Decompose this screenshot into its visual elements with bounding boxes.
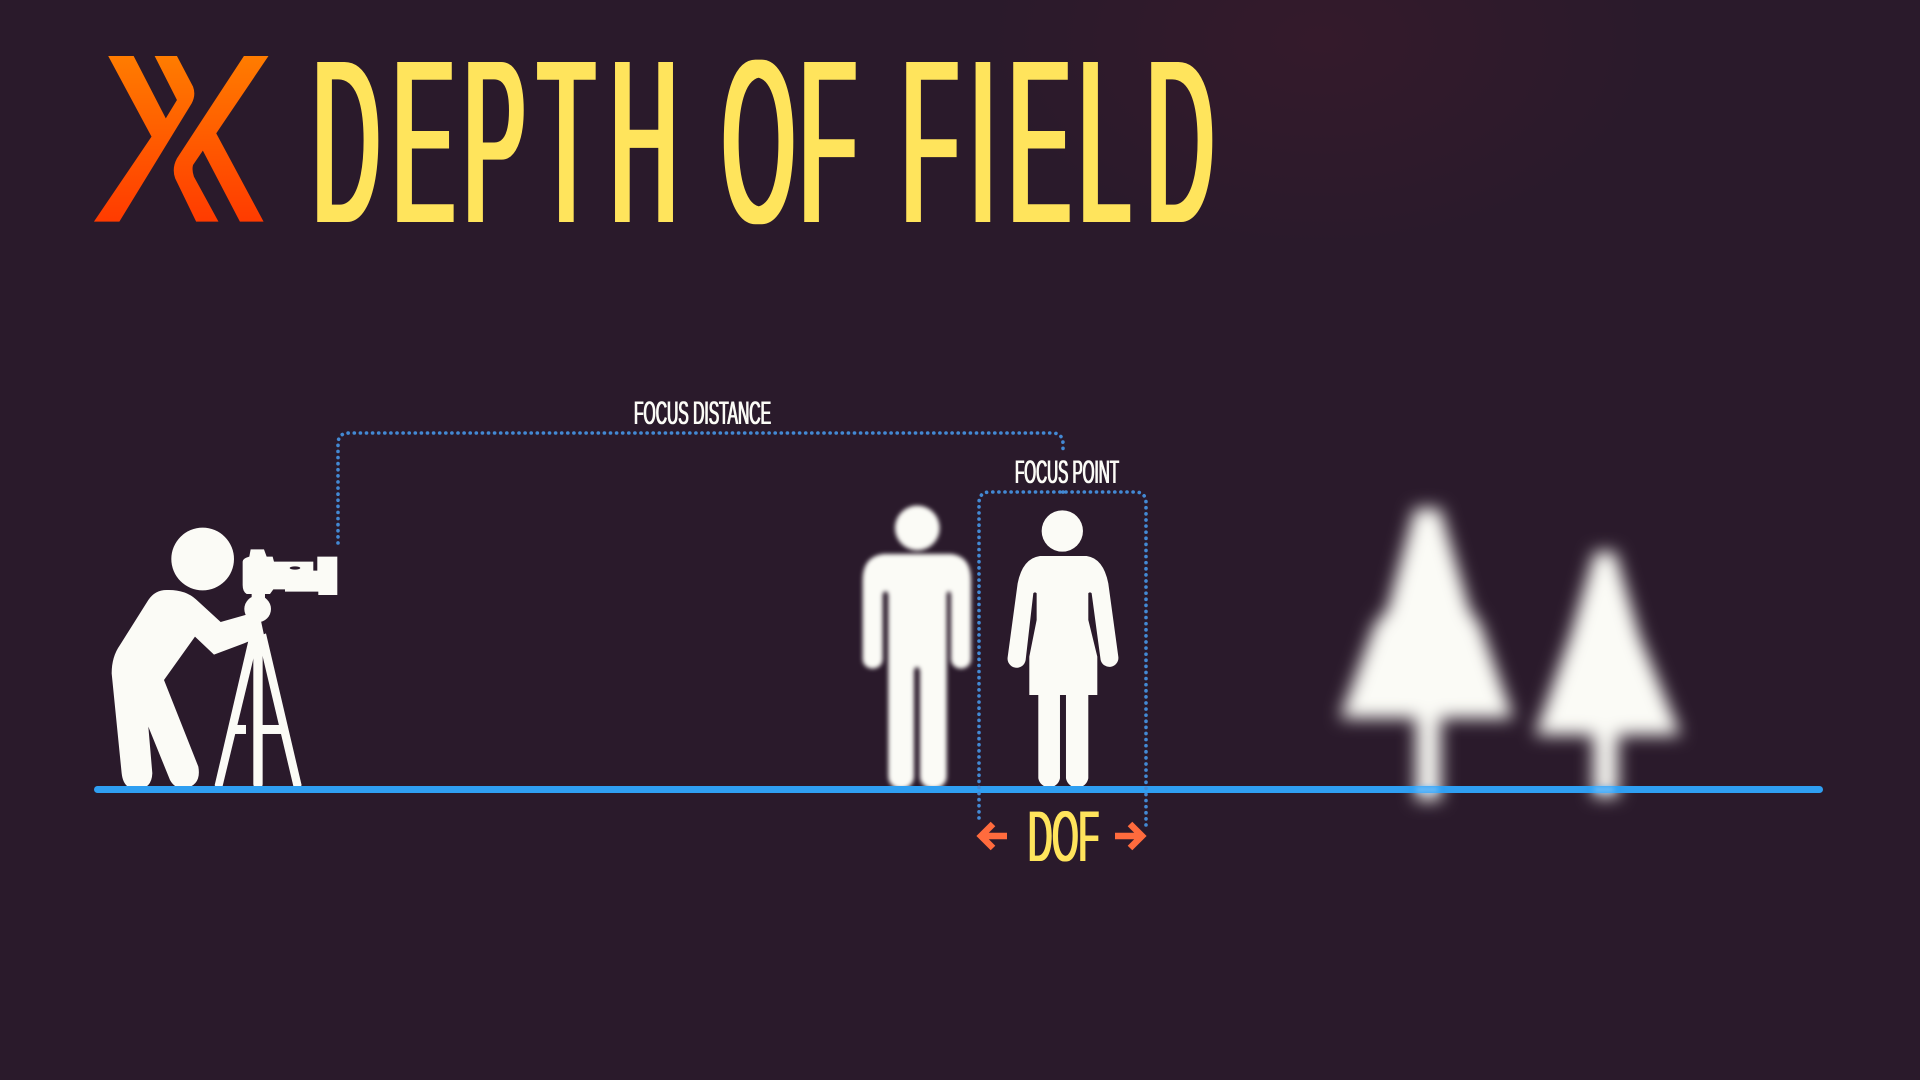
camera [243,549,337,595]
tree far [1535,552,1681,797]
photographer with tripod and camera [112,528,337,789]
text: DOF [1028,798,1099,877]
tripod [215,588,302,788]
arrow left [981,824,1007,848]
blurred trees [1340,508,1681,800]
woman figure [1008,510,1118,788]
focus distance bracket [338,433,1063,543]
text: FOCUS DISTANCE [634,395,771,431]
ground line [94,786,1823,793]
photographer body [112,590,264,789]
blurred man figure [863,506,971,789]
man body [863,554,971,789]
woman body [1008,556,1118,788]
tree near [1340,508,1513,800]
text: FOCUS POINT [1015,454,1119,490]
photographer head [171,528,234,590]
logo [94,56,268,222]
title: DEPTH OF FIELD [313,12,1214,272]
woman head [1042,510,1083,552]
depth of field bracket [979,492,1146,825]
man head [895,506,940,550]
arrow right [1115,824,1142,848]
